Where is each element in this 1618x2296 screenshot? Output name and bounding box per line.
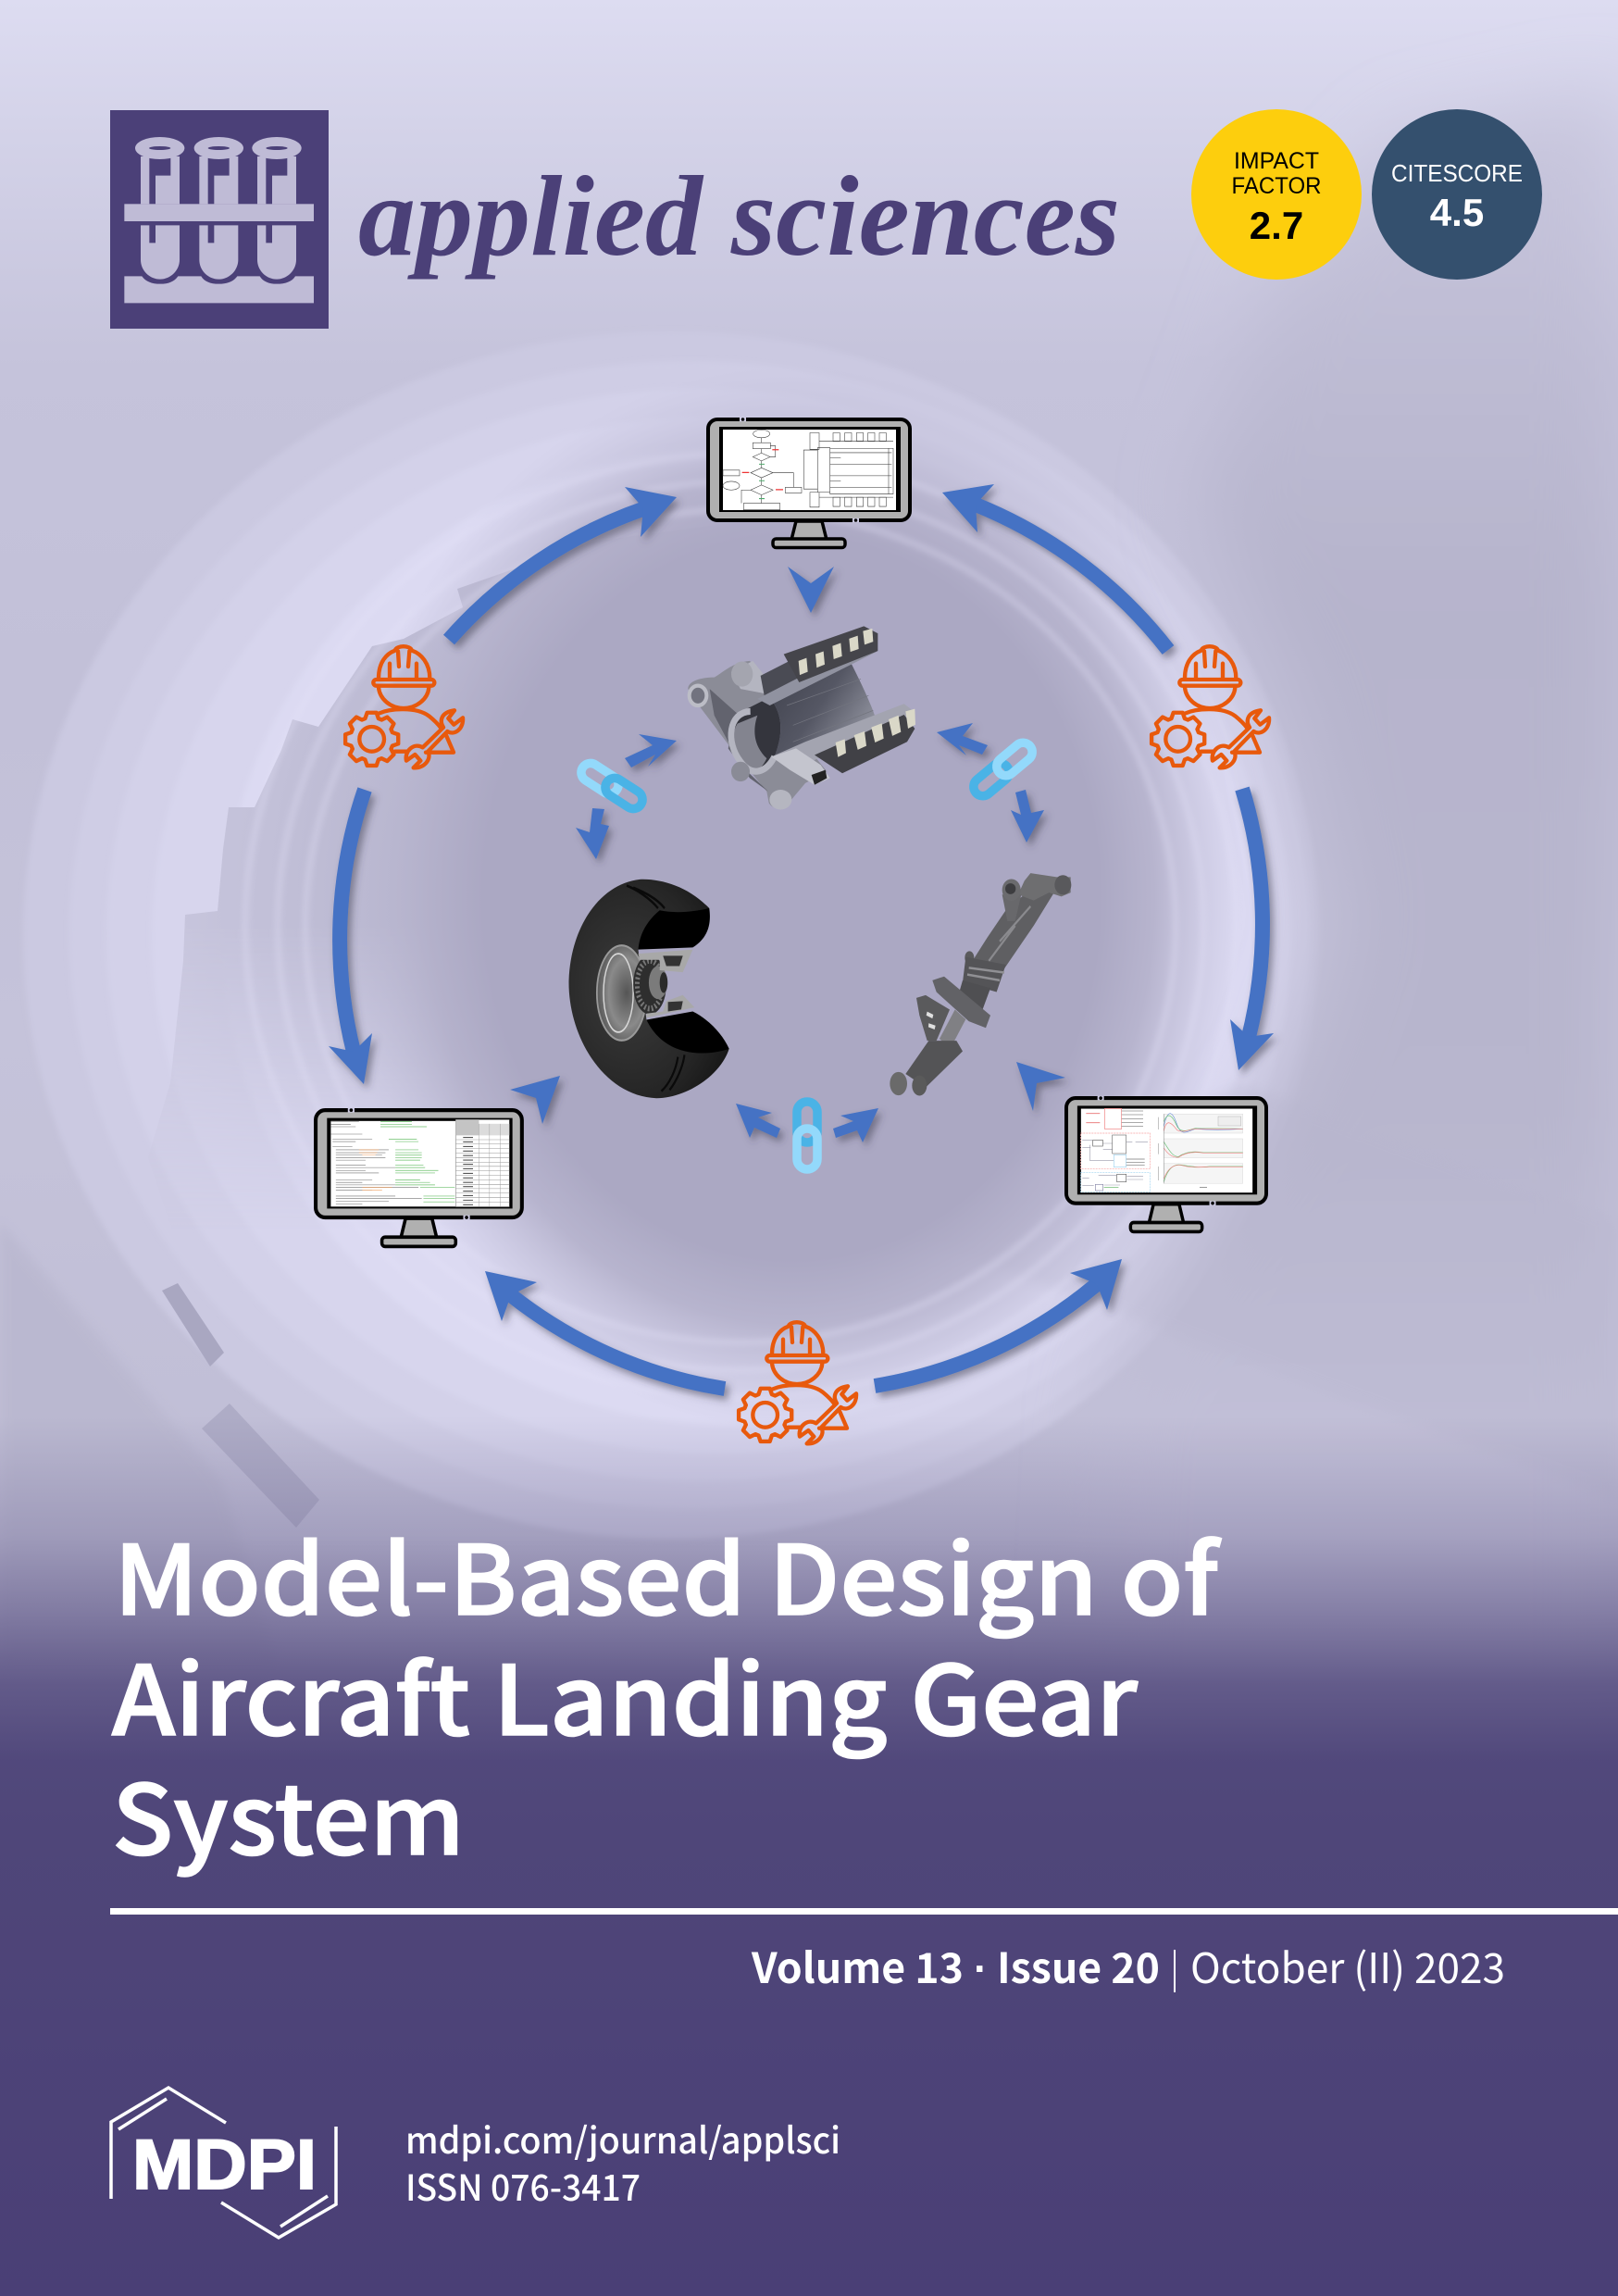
journal URL and ISSN xyxy=(405,2113,840,2212)
issue line: October (II) 2023 xyxy=(1190,1935,1505,1995)
journal URL and ISSN: ISSN 076-3417 xyxy=(405,2160,641,2212)
arrow: bottom right xyxy=(875,1259,1122,1386)
arrow: top right xyxy=(942,484,1168,650)
engineer icon: left xyxy=(345,646,463,767)
issue line xyxy=(751,1935,1505,1995)
inner arrows xyxy=(510,567,1065,1142)
issue line: · xyxy=(974,1945,988,1992)
monitor: right simulation plots xyxy=(1066,1096,1266,1231)
badge: citescore: CITESCORE xyxy=(1391,159,1523,187)
badge: impact factor xyxy=(1191,109,1362,280)
3D model: actuator cutaway xyxy=(688,626,915,809)
background xyxy=(0,0,1618,1742)
engineer icon: bottom xyxy=(739,1322,856,1443)
monitor: left code and table xyxy=(316,1108,522,1246)
title: Aircraft Landing Gear xyxy=(112,1623,1138,1763)
arrow: top left xyxy=(449,487,677,640)
journal URL and ISSN: mdpi.com/journal/applsci xyxy=(405,2113,840,2165)
issue line: Volume 13 xyxy=(751,1935,964,1995)
journal name: applied sciences xyxy=(358,153,1120,280)
title: Model-Based Design of xyxy=(114,1503,1222,1642)
badge: impact factor: FACTOR xyxy=(1231,173,1322,199)
MDPI logo xyxy=(111,2088,336,2238)
arrow: left xyxy=(329,790,372,1084)
link icon: top left xyxy=(578,760,646,812)
badge: impact factor: IMPACT xyxy=(1234,148,1319,174)
title: System xyxy=(112,1742,465,1882)
arrow: right xyxy=(1230,789,1274,1070)
3D model: landing gear strut xyxy=(890,873,1071,1096)
stair region xyxy=(172,568,515,1139)
link icon: top right xyxy=(970,739,1036,800)
title rule xyxy=(110,1908,1618,1915)
link icon: bottom xyxy=(797,1102,817,1169)
bottom band xyxy=(0,1416,1618,2296)
cycle arrows xyxy=(329,484,1274,1389)
engineer icon: right xyxy=(1151,646,1269,767)
monitor: top flowchart and gear model xyxy=(708,418,910,548)
title xyxy=(112,1503,1222,1882)
badge: citescore: 4.5 xyxy=(1430,191,1484,234)
journal logo xyxy=(110,110,329,329)
3D model: wheel and tyre xyxy=(569,880,729,1098)
MDPI logo: MDPI xyxy=(132,2126,317,2204)
arrow: bottom left xyxy=(485,1271,725,1389)
issue line: Issue 20 xyxy=(997,1935,1160,1995)
badge: impact factor: 2.7 xyxy=(1250,204,1303,247)
badge: citescore xyxy=(1372,109,1542,280)
